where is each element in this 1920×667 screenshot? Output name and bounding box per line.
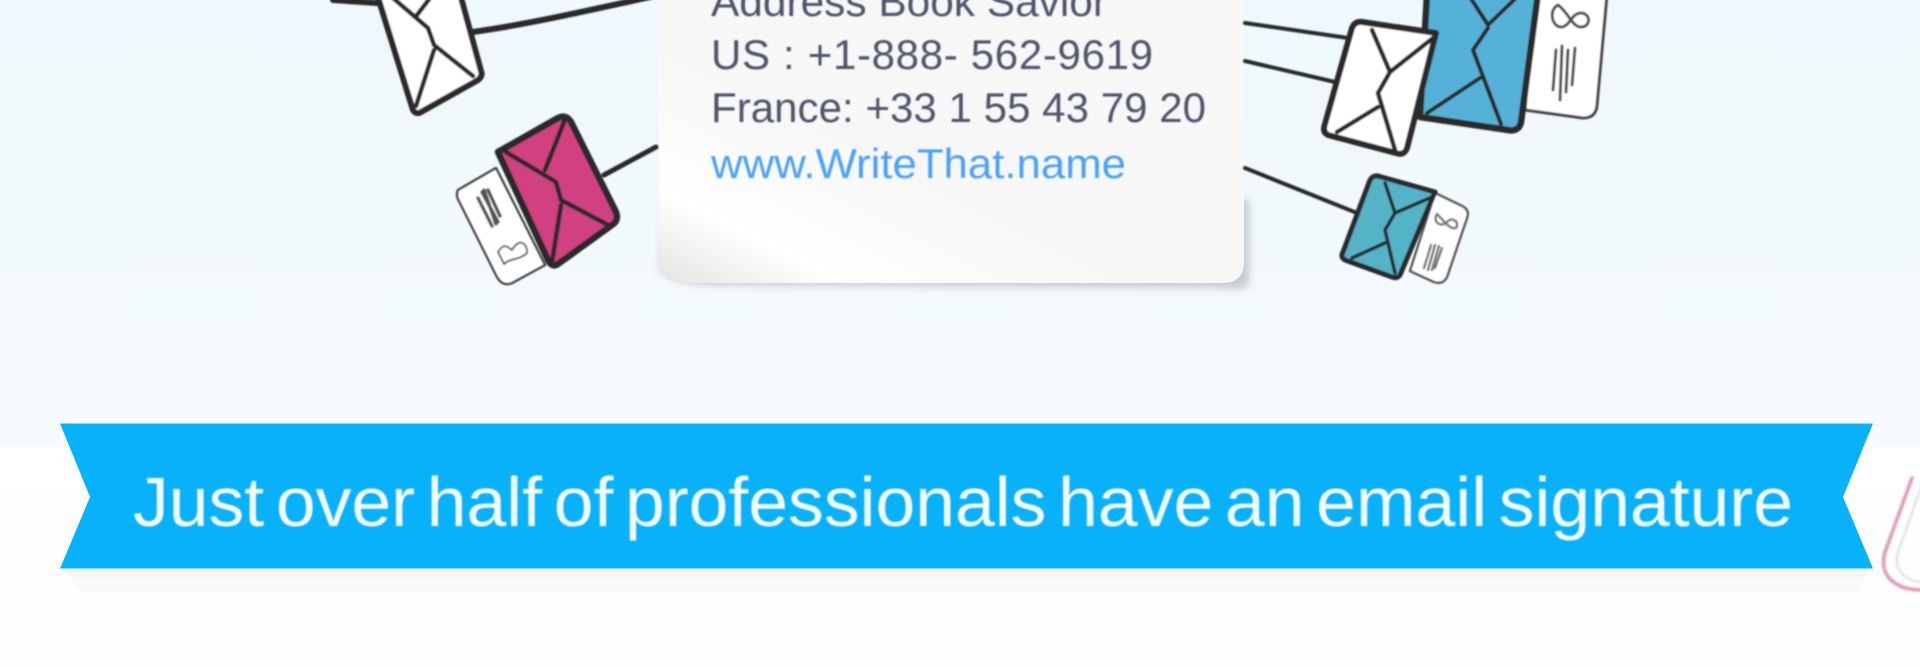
connector lines bbox=[1245, 23, 1357, 213]
ribbon shadow bbox=[64, 569, 1868, 596]
card contact details: US : +1-888- 562-9619 bbox=[711, 31, 1153, 78]
card contact details: www.WriteThat.name bbox=[710, 140, 1126, 187]
card contact details bbox=[710, 0, 1206, 187]
card contact details: France: +33 1 55 43 79 20 bbox=[711, 84, 1206, 131]
teal envelope with card bbox=[1342, 176, 1468, 283]
blue envelope with card bbox=[1420, 0, 1607, 130]
ribbon heading: Just over half of professionals have an email signature bbox=[133, 463, 1793, 541]
left white envelope with connector bbox=[333, 0, 655, 113]
ribbon banner bbox=[60, 424, 1873, 568]
right group of envelopes bbox=[1245, 0, 1607, 283]
pink envelope with card bbox=[457, 117, 656, 284]
card shadow bbox=[660, 200, 1249, 289]
icon: paper clip bbox=[1884, 478, 1920, 590]
address card bbox=[659, 0, 1249, 289]
white envelope bbox=[1324, 22, 1436, 154]
